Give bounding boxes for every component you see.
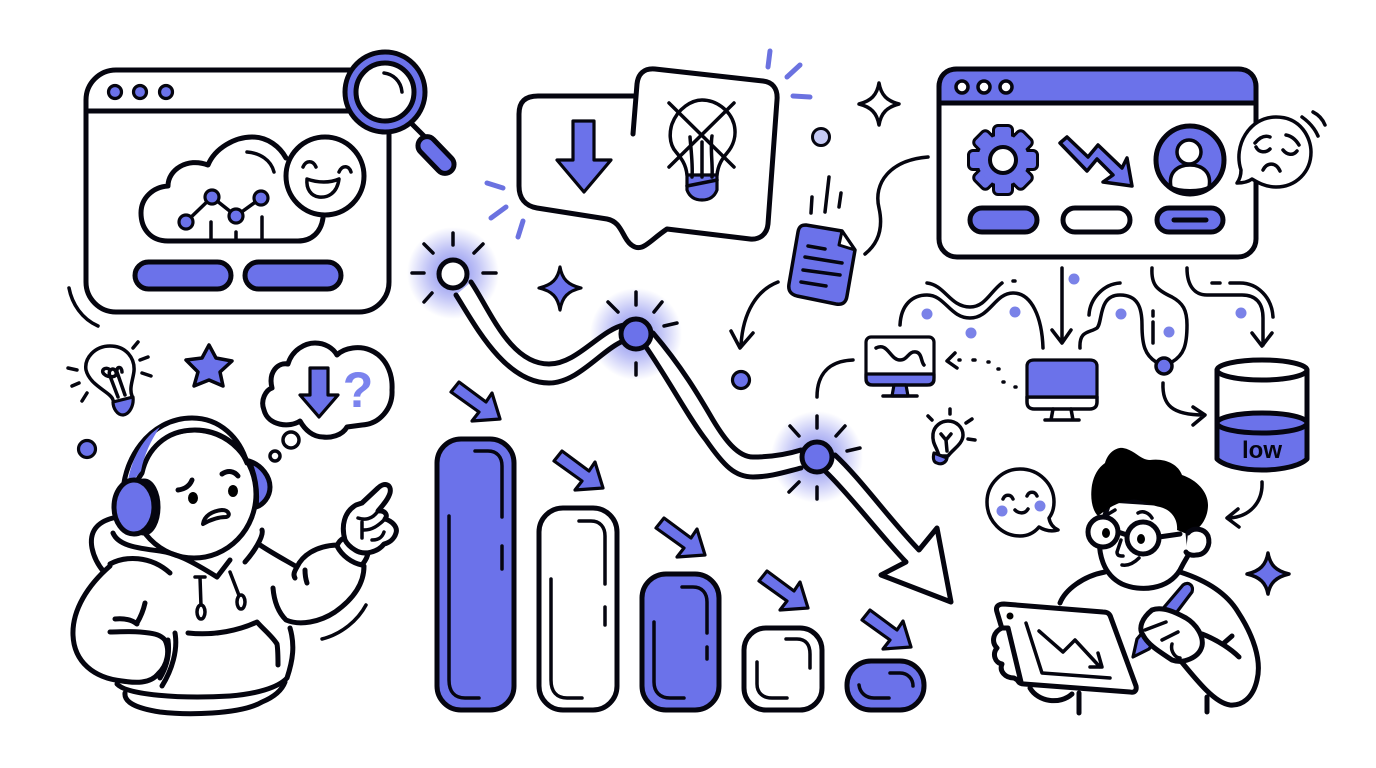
arrow: bar 5 [862,610,911,649]
node rays [412,233,860,499]
icon: zigzag down arrow [1060,137,1132,186]
label: low: low [1242,437,1282,464]
node: start [439,260,467,288]
character: confused person in hoodie with headphones [73,418,396,714]
character: person with tablet [994,448,1258,713]
arrow: doc to dot [731,282,778,348]
icon: star [186,345,232,386]
icon: laughing face [286,137,364,215]
drawstrings [195,572,240,606]
icon: magnifying glass [345,52,458,177]
node: middle [621,319,651,349]
icon: falling document [731,157,928,348]
panel: happy cloud analytics browser window [69,52,458,326]
glasses [1088,510,1180,565]
button: left pill [135,262,231,289]
chart: declining trend line with glowing nodes [407,227,951,602]
icon: down arrow [557,121,611,192]
head [1099,500,1190,588]
head [132,430,256,558]
icon: solid monitor [1027,360,1097,420]
icon: user avatar [1156,126,1224,194]
dot: below arrow [732,372,750,388]
icon: cloud with line chart [141,137,323,241]
dot: left [78,440,96,458]
hood collar [113,530,262,577]
cuff and pointing hand [337,485,396,565]
bar 2 [539,508,617,710]
icon: sad face bubble [1237,112,1325,187]
sparkle: white [859,83,899,125]
sparkle: blue right [1247,553,1289,594]
button: gear pill [970,208,1037,232]
stylus [1133,583,1192,657]
icon: small monitor with wave [866,337,934,396]
bar 1 [437,439,514,710]
icon: light bulb left [68,342,151,415]
panel: speech bubbles with down arrow and crossed bulb [487,51,899,248]
bar 5 [847,661,924,710]
arrow: bar 1 [451,382,500,421]
icon: crossed-out light bulb [669,100,735,200]
motion arc [322,605,366,639]
icon: gear [970,127,1036,193]
ear [1186,529,1209,555]
question mark: ? [343,362,373,418]
panel: unhappy dashboard browser window [939,69,1325,257]
arrow: trend head [826,455,951,602]
arrow: cylinder to person [1227,482,1262,527]
arm [260,545,364,623]
bar 3 [642,574,719,710]
decorative sparks [487,51,810,237]
headphones [114,418,270,534]
right hand [1141,609,1202,661]
hair [1091,448,1208,534]
torso [73,540,293,695]
button: user pill [1157,208,1223,232]
arrow: bar 2 [554,451,603,490]
connector: doc to window [865,157,928,254]
button: right pill [245,262,341,289]
arrow: bar 3 [656,518,705,557]
icon: low level cylinder [1217,360,1307,470]
thought bubble with arrow and question mark [263,343,392,461]
icon: smiling speech bubble [987,469,1058,536]
bar chart: shrinking bars [437,382,924,710]
dot [812,128,830,146]
tablet [996,604,1136,692]
diagram: connected flow lines [817,268,1273,425]
hood back [91,518,113,572]
button: arrow pill [1063,208,1130,232]
bar 4 [744,628,822,710]
face [178,472,238,524]
left hand [994,628,1021,682]
sparkle: blue center [539,267,581,310]
arrow: bar 4 [759,571,808,610]
icon: small light bulb [928,409,975,464]
body [1060,572,1258,705]
node: low [802,442,832,472]
